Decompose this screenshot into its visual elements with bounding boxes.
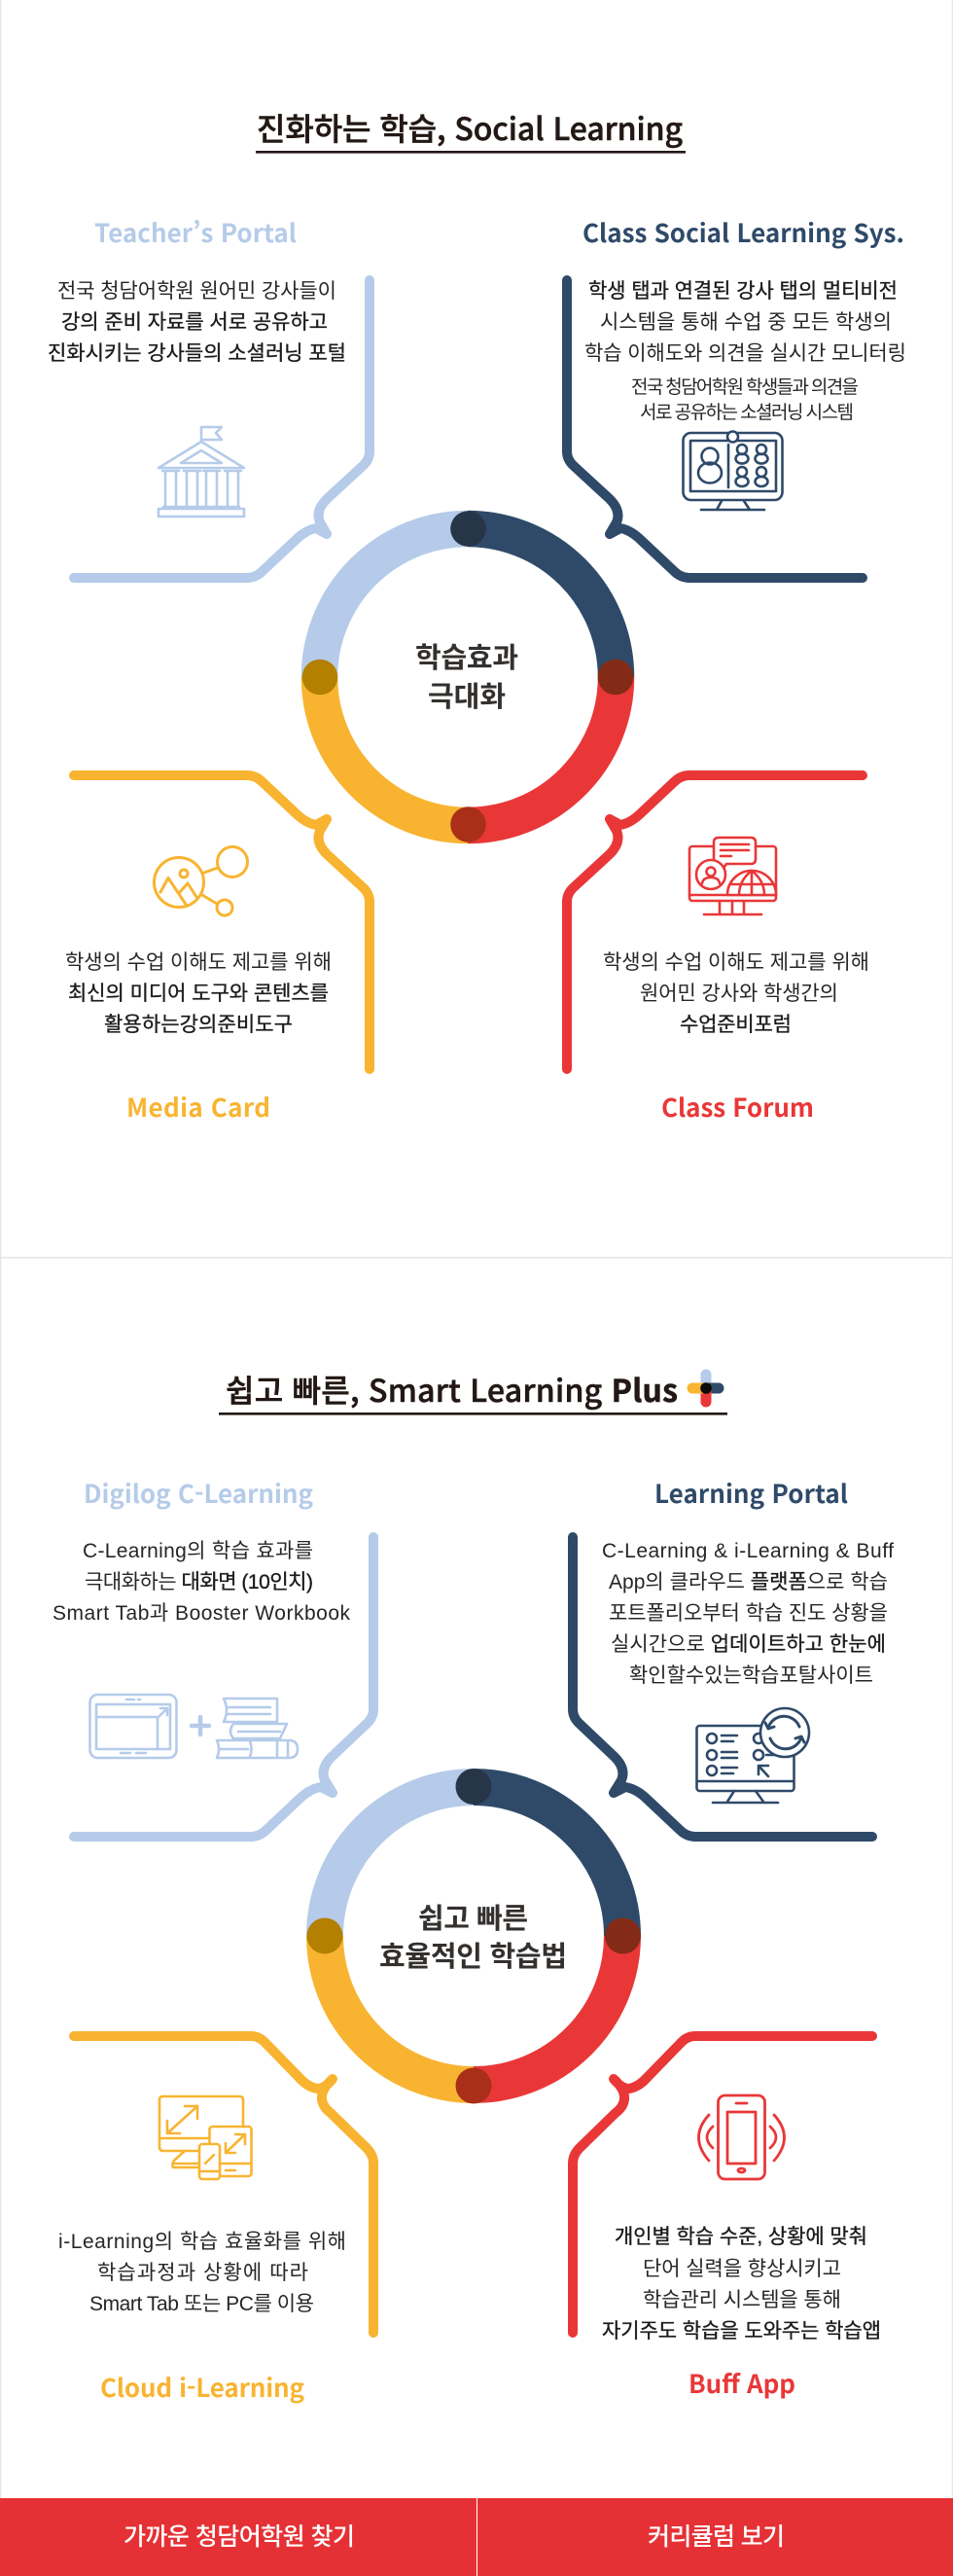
title: smart learning plus: 쉽고 빠른, Smart Learning Plus xyxy=(226,1367,678,1412)
body text: 시스템을 통해 수업 중 모든 학생의 xyxy=(600,311,892,334)
icon: responsive devices xyxy=(159,2096,251,2179)
icon: academy building xyxy=(159,427,244,517)
icon: colour plus xyxy=(692,1375,719,1402)
body text: 극대화하는 대화면 (10인치) xyxy=(85,1571,313,1593)
connector: digilog c-learning xyxy=(74,1537,373,1837)
ring centre label xyxy=(379,1896,567,1975)
heading: Cloud i-Learning xyxy=(100,2369,304,2405)
icon: video classroom monitor xyxy=(683,432,782,510)
connector: teacher's portal xyxy=(74,280,370,578)
heading: Teacher’s Portal xyxy=(94,214,297,250)
icon: tablet plus books xyxy=(89,1695,298,1758)
body text xyxy=(584,280,906,423)
body text: 학습관리 시스템을 통해 xyxy=(643,2289,841,2311)
ring centre label xyxy=(415,635,518,715)
body text: 원어민 강사와 학생간의 xyxy=(640,983,838,1005)
icon: portal monitor with sync xyxy=(696,1708,809,1803)
icon: media sharing xyxy=(154,846,247,915)
button: view curriculum xyxy=(477,2498,953,2576)
body text xyxy=(65,951,332,1036)
body text: 실시간으로 업데이트하고 한눈에 xyxy=(611,1633,886,1656)
body text: i-Learning의 학습 효율화를 위해 xyxy=(58,2231,346,2253)
body text xyxy=(58,2231,346,2315)
body text: Smart Tab과 Booster Workbook xyxy=(53,1602,350,1625)
body text: 학생의 수업 이해도 제고를 위해 xyxy=(65,951,332,974)
connector: class social learning xyxy=(567,280,863,578)
icon: forum monitor and globe xyxy=(689,838,776,914)
block: learning portal xyxy=(602,1475,894,1803)
panel: smart learning plus xyxy=(53,1367,894,2405)
heading: Media Card xyxy=(126,1089,270,1125)
ring centre label: 학습효과 xyxy=(415,635,518,676)
heading: Class Forum xyxy=(661,1089,814,1125)
heading: Digilog C-Learning xyxy=(84,1475,313,1511)
body text: 활용하는강의준비도구 xyxy=(104,1014,293,1036)
body text xyxy=(602,1540,894,1687)
body text xyxy=(603,951,869,1036)
heading: Class Social Learning Sys. xyxy=(582,214,904,250)
body text: 학습과정과 상황에 따라 xyxy=(97,2262,308,2284)
body text: 전국 청담어학원 원어민 강사들이 xyxy=(57,280,336,303)
body text: 최신의 미디어 도구와 콘텐츠를 xyxy=(68,983,329,1005)
icon: vibrating phone xyxy=(698,2095,784,2179)
body text: 전국 청담어학원 학생들과 의견을 xyxy=(631,376,859,398)
body text: 확인할수있는학습포탈사이트 xyxy=(629,1664,873,1687)
body text: 강의 준비 자료를 서로 공유하고 xyxy=(61,311,328,334)
ring centre label: 극대화 xyxy=(428,674,506,715)
block: class forum xyxy=(603,838,869,1125)
block: teacher's portal xyxy=(48,214,346,517)
ring diagram: learning effect xyxy=(302,511,633,842)
body text xyxy=(48,280,346,365)
block: digilog c-learning xyxy=(53,1475,350,1758)
button: find nearest academy xyxy=(0,2498,476,2576)
ring centre label: 쉽고 빠른 xyxy=(418,1896,528,1937)
panel: social learning xyxy=(48,105,906,1125)
ring diagram: easy and fast xyxy=(307,1769,641,2103)
block: media card xyxy=(65,846,332,1125)
button: view curriculum: 커리큘럼 보기 xyxy=(648,2518,785,2553)
block: cloud i-learning xyxy=(58,2096,346,2405)
block: buff app xyxy=(602,2095,881,2401)
connector: media card xyxy=(74,775,370,1069)
body text: 학생의 수업 이해도 제고를 위해 xyxy=(603,951,869,974)
button: find nearest academy: 가까운 청담어학원 찾기 xyxy=(124,2518,355,2553)
connector: buff app xyxy=(573,2036,872,2333)
ring centre label: 효율적인 학습법 xyxy=(379,1934,567,1975)
title: social learning: 진화하는 학습, Social Learning xyxy=(257,105,683,150)
body text: Smart Tab 또는 PC를 이용 xyxy=(89,2293,314,2315)
body text: 학습 이해도와 의견을 실시간 모니터링 xyxy=(584,342,906,365)
heading: Learning Portal xyxy=(654,1475,848,1511)
body text: C-Learning & i-Learning & Buff xyxy=(602,1540,894,1562)
connector: cloud i-learning xyxy=(74,2036,373,2333)
body text: 단어 실력을 향상시키고 xyxy=(643,2258,841,2280)
body text: 진화시키는 강사들의 소셜러닝 포털 xyxy=(48,342,346,365)
body text: 학생 탭과 연결된 강사 탭의 멀티비전 xyxy=(588,280,898,303)
body text xyxy=(602,2226,881,2343)
body text: App의 클라우드 플랫폼으로 학습 xyxy=(609,1571,888,1593)
body text: 서로 공유하는 소셜러닝 시스템 xyxy=(640,402,854,423)
body text: 포트폴리오부터 학습 진도 상황을 xyxy=(609,1602,888,1625)
connector: class forum xyxy=(567,775,863,1069)
body text: C-Learning의 학습 효과를 xyxy=(83,1540,313,1562)
heading: Buff App xyxy=(688,2365,795,2401)
connector: learning portal xyxy=(573,1537,872,1837)
body text: 수업준비포럼 xyxy=(680,1014,792,1036)
body text xyxy=(53,1540,350,1625)
block: class social learning system xyxy=(582,214,906,510)
body text: 자기주도 학습을 도와주는 학습앱 xyxy=(602,2320,881,2343)
body text: 개인별 학습 수준, 상황에 맞춰 xyxy=(615,2226,867,2248)
